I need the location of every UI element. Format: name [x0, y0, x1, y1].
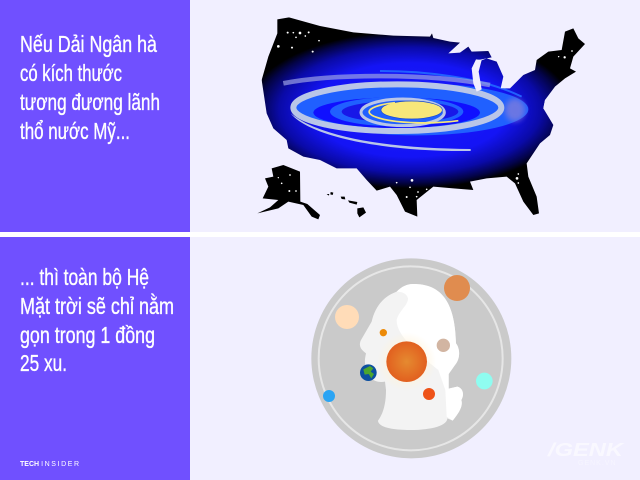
planet: Earth: [360, 364, 377, 381]
galaxy wide blue band: [376, 84, 528, 136]
text block: bottom caption: 25 xu.: [20, 350, 67, 376]
galaxy core ring: [361, 99, 444, 126]
text block: top caption: thổ nước Mỹ...: [20, 118, 130, 144]
planet: Uranus: [476, 373, 493, 389]
watermark: GENK: GENK.VN: [578, 460, 617, 467]
background panel: top right: [190, 0, 640, 232]
logo: Tech Insider: TECH INSIDER: [20, 461, 81, 468]
galaxy core: [381, 101, 442, 119]
planet: Saturn: [335, 305, 359, 329]
planet: Venus: [437, 339, 450, 352]
background panel: bottom right: [190, 237, 640, 480]
portrait silhouette: [360, 284, 463, 430]
planet: Jupiter: [444, 275, 470, 301]
planet: Mars: [423, 388, 435, 400]
Alaska: [257, 165, 320, 219]
watermark: GENK: [547, 440, 626, 467]
watermark: GENK: /GENK: [547, 440, 626, 460]
text block: bottom caption: [20, 264, 174, 376]
Hawaii: [327, 192, 366, 217]
galaxy dark blue inner: [313, 97, 480, 128]
text block: bottom caption: Mặt trời sẽ chỉ nằm: [20, 293, 174, 319]
panel: top caption: [0, 0, 190, 232]
map: USA with Milky Way: [253, 13, 590, 220]
galaxy outer faint arm: [283, 76, 490, 85]
planet: Mercury: [380, 329, 387, 336]
Lake Michigan and bays: [472, 59, 565, 117]
galaxy upper blue arm: [380, 71, 522, 97]
text block: top caption: Nếu Dải Ngân hà: [20, 31, 157, 57]
coin rim: [319, 266, 503, 450]
planet: Neptune: [323, 390, 335, 402]
sun halo: [377, 332, 436, 391]
galaxy right haze: [505, 98, 525, 122]
coin disc: [311, 258, 511, 458]
text block: bottom caption: ... thì toàn bộ Hệ: [20, 264, 149, 290]
text block: top caption: tương đương lãnh: [20, 89, 160, 115]
galaxy pale ring: [293, 84, 501, 131]
galaxy yellow arm: [369, 103, 458, 123]
galaxy blue ring: [330, 97, 463, 126]
sun: [386, 341, 427, 382]
mainland with galaxy: [253, 13, 590, 220]
text block: top caption: [20, 31, 160, 144]
text block: top caption: có kích thước: [20, 60, 122, 86]
stars: [277, 31, 573, 198]
galaxy lower arm: [291, 113, 471, 151]
text block: bottom caption: gọn trong 1 đồng: [20, 322, 155, 348]
galaxy inner dark blue: [342, 102, 458, 120]
coin illustration: [311, 258, 511, 458]
panel: bottom caption: [0, 237, 190, 480]
